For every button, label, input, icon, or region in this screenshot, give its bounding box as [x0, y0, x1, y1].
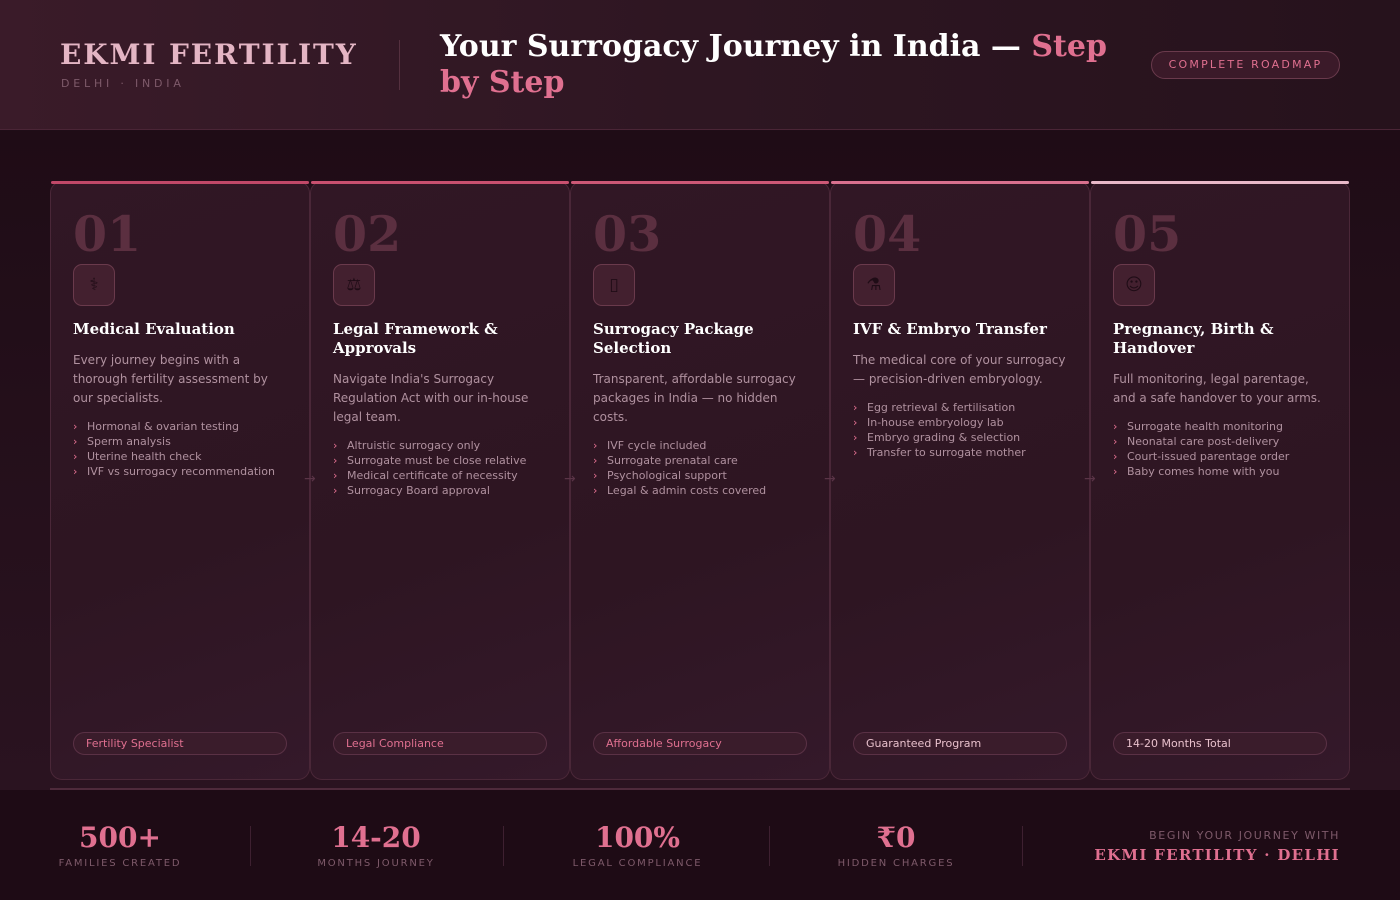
- step 3 text: Surrogacy Package Selection: [593, 320, 754, 357]
- step 4 text: Egg retrieval & fertilisation: [867, 401, 1015, 414]
- step 1 text: Uterine health check: [87, 450, 201, 463]
- button: complete roadmap: [1151, 51, 1340, 79]
- panel: step 1: 01: [73, 205, 141, 263]
- panel: step 4: [830, 181, 1090, 780]
- stat: families: 500+: [79, 821, 161, 854]
- panel: step 3: [570, 181, 830, 780]
- call to action: [1094, 829, 1340, 864]
- arrow: →: [1084, 471, 1096, 487]
- icon: scales: [333, 264, 375, 306]
- step 4 text: Embryo grading & selection: [867, 431, 1020, 444]
- step 3 text: IVF cycle included: [607, 439, 706, 452]
- step 2 text: [332, 320, 528, 497]
- stat: months: MONTHS JOURNEY: [317, 858, 435, 869]
- tag: Fertility Specialist: [86, 737, 184, 750]
- panel: step 2: 02: [333, 205, 401, 263]
- step 3 text: Transparent, affordable surrogacy packages in India — no hidden costs.: [593, 372, 796, 424]
- button: complete roadmap: COMPLETE ROADMAP: [1169, 58, 1322, 71]
- arrow: →: [564, 471, 576, 487]
- step 1 text: IVF vs surrogacy recommendation: [87, 465, 275, 478]
- panel: step 5: 05: [1113, 205, 1181, 263]
- stats bar: [0, 790, 1400, 900]
- icon: baby: ☺: [1125, 275, 1143, 295]
- panel: step 3: 03: [593, 205, 661, 263]
- step 2 text: Altruistic surrogacy only: [347, 439, 480, 452]
- step 2 text: Surrogate must be close relative: [347, 454, 526, 467]
- step 2 text: Medical certificate of necessity: [347, 469, 518, 482]
- tag: [73, 732, 287, 755]
- stat: hidden charges: ₹0: [877, 821, 915, 854]
- step 3 text: Psychological support: [607, 469, 727, 482]
- step 3 text: Legal & admin costs covered: [607, 484, 766, 497]
- step 5 text: Pregnancy, Birth & Handover: [1113, 320, 1273, 357]
- step 5 text: Neonatal care post-delivery: [1127, 435, 1279, 448]
- panel: step 5: [1090, 181, 1350, 780]
- tag: [593, 732, 807, 755]
- arrow: →: [304, 471, 316, 487]
- logo: EKMI FERTILITY: [60, 38, 358, 71]
- panel: step 1: [50, 181, 310, 780]
- step 5 text: Baby comes home with you: [1127, 465, 1280, 478]
- step 1 text: Every journey begins with a thorough fertility assessment by our specialists.: [73, 353, 268, 405]
- panel: step 4: 04: [853, 205, 921, 263]
- icon: scales: ⚖: [346, 275, 362, 295]
- step 4 text: In-house embryology lab: [867, 416, 1004, 429]
- icon: microscope: [853, 264, 895, 306]
- panel: step 2: [310, 181, 570, 780]
- step 4 text: Transfer to surrogate mother: [867, 446, 1026, 459]
- stat: hidden charges: [838, 821, 954, 869]
- step 4 text: IVF & Embryo Transfer: [853, 320, 1047, 338]
- tag: Legal Compliance: [346, 737, 444, 750]
- step 5 text: Court-issued parentage order: [1127, 450, 1289, 463]
- icon: clipboard: [593, 264, 635, 306]
- title: Your Surrogacy Journey in India — Step by Step: [440, 29, 1107, 100]
- location: DELHI · INDIA: [61, 77, 185, 90]
- tag: Guaranteed Program: [866, 737, 981, 750]
- step 5 text: Surrogate health monitoring: [1127, 420, 1283, 433]
- step 1 text: Sperm analysis: [87, 435, 171, 448]
- stat: legal: [573, 821, 702, 869]
- tag: 14-20 Months Total: [1126, 737, 1231, 750]
- stat: months: [317, 821, 435, 869]
- step 3 text: [592, 320, 796, 497]
- stat: legal: 100%: [595, 821, 680, 854]
- step 2 text: Surrogacy Board approval: [347, 484, 490, 497]
- step 2 text: Navigate India's Surrogacy Regulation Act with our in-house legal team.: [333, 372, 528, 424]
- icon: baby: [1113, 264, 1155, 306]
- step 5 text: [1113, 320, 1321, 478]
- icon: stethoscope: ⚕: [89, 275, 99, 295]
- stat: hidden charges: HIDDEN CHARGES: [838, 858, 954, 869]
- header: [0, 0, 1400, 130]
- tag: [333, 732, 547, 755]
- stat: legal: LEGAL COMPLIANCE: [573, 858, 702, 869]
- stat: months: 14-20: [331, 821, 421, 854]
- step 1 text: Hormonal & ovarian testing: [87, 420, 239, 433]
- tag: [1113, 732, 1327, 755]
- step 1 text: Medical Evaluation: [73, 320, 235, 338]
- icon: microscope: ⚗: [866, 275, 882, 295]
- call to action: BEGIN YOUR JOURNEY WITH: [1149, 829, 1340, 842]
- tag: Affordable Surrogacy: [606, 737, 722, 750]
- step 1 text: [73, 320, 275, 478]
- stat: families: [59, 821, 181, 869]
- arrow: →: [824, 471, 836, 487]
- step 3 text: Surrogate prenatal care: [607, 454, 738, 467]
- tag: [853, 732, 1067, 755]
- icon: clipboard: ▯: [609, 275, 619, 295]
- step 4 text: The medical core of your surrogacy — precision-driven embryology.: [853, 353, 1066, 386]
- icon: stethoscope: [73, 264, 115, 306]
- step 5 text: Full monitoring, legal parentage, and a safe handover to your arms.: [1113, 372, 1321, 405]
- stat: families: FAMILIES CREATED: [59, 858, 181, 869]
- step 2 text: Legal Framework & Approvals: [333, 320, 498, 357]
- call to action: EKMI FERTILITY · DELHI: [1094, 846, 1340, 864]
- step 4 text: [852, 320, 1066, 459]
